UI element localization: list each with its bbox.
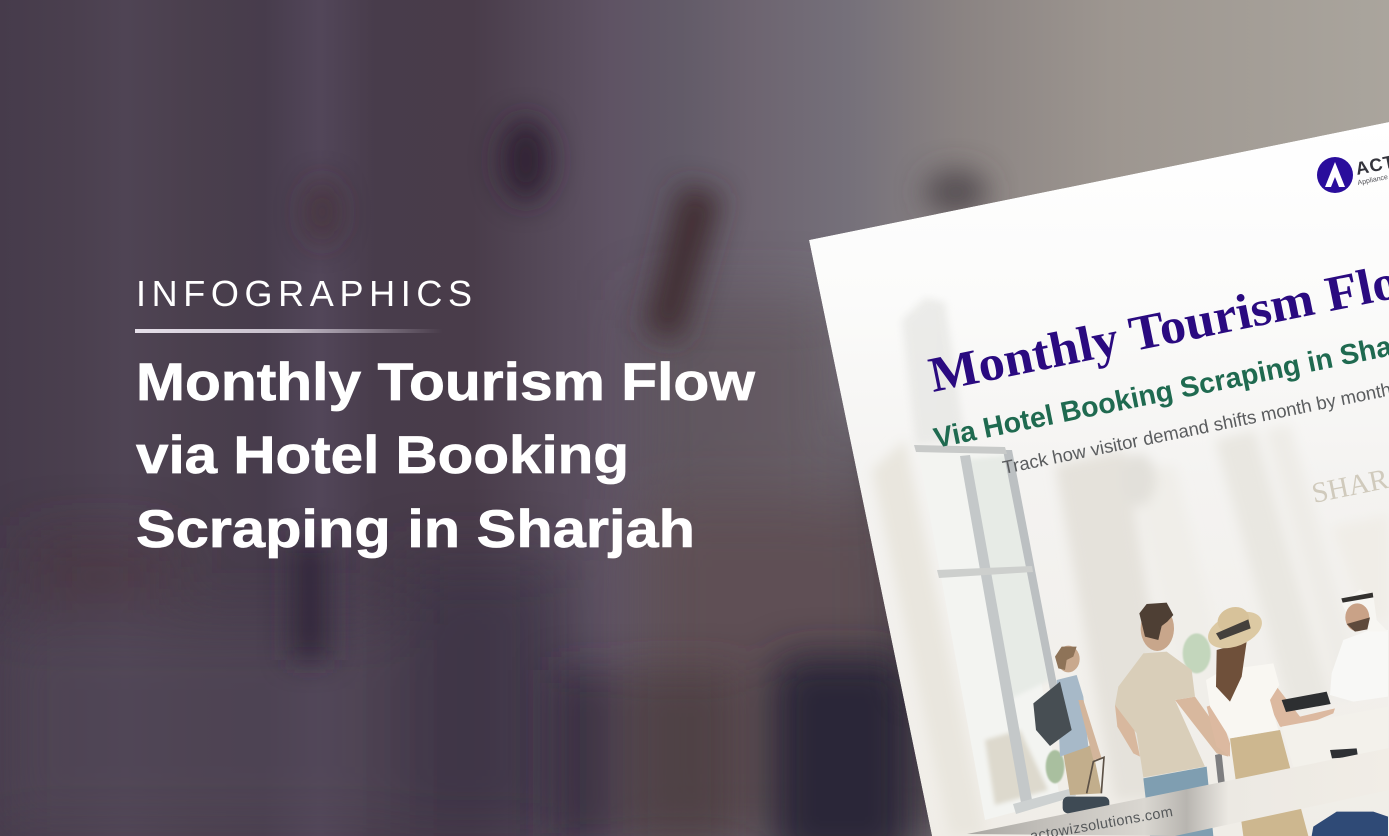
title: via Hotel Booking xyxy=(136,426,629,485)
plants xyxy=(1046,633,1211,783)
man in beige t-shirt xyxy=(1115,603,1228,836)
page tagline: Track how visitor demand shifts month by month xyxy=(1001,378,1389,478)
window xyxy=(902,298,1076,820)
lobby interior on the page xyxy=(872,425,1389,836)
receptionist in white robe xyxy=(1330,589,1388,702)
title: Scraping in Sharjah xyxy=(136,500,695,559)
traveller with backpack xyxy=(1033,646,1109,813)
logo xyxy=(1317,156,1389,193)
footer strip xyxy=(968,754,1358,836)
label: INFOGRAPHICS: INFOGRAPHICS xyxy=(136,273,472,314)
panel: tilted infographic page xyxy=(809,122,1389,836)
second suitcase xyxy=(1312,812,1388,836)
woman with straw hat xyxy=(1203,603,1335,836)
logo: Appliance xyxy=(1357,174,1389,187)
title: Monthly Tourism Flow xyxy=(136,353,756,412)
reception desk and tablet xyxy=(1282,692,1358,758)
divider rule xyxy=(135,329,443,333)
title xyxy=(136,353,756,559)
